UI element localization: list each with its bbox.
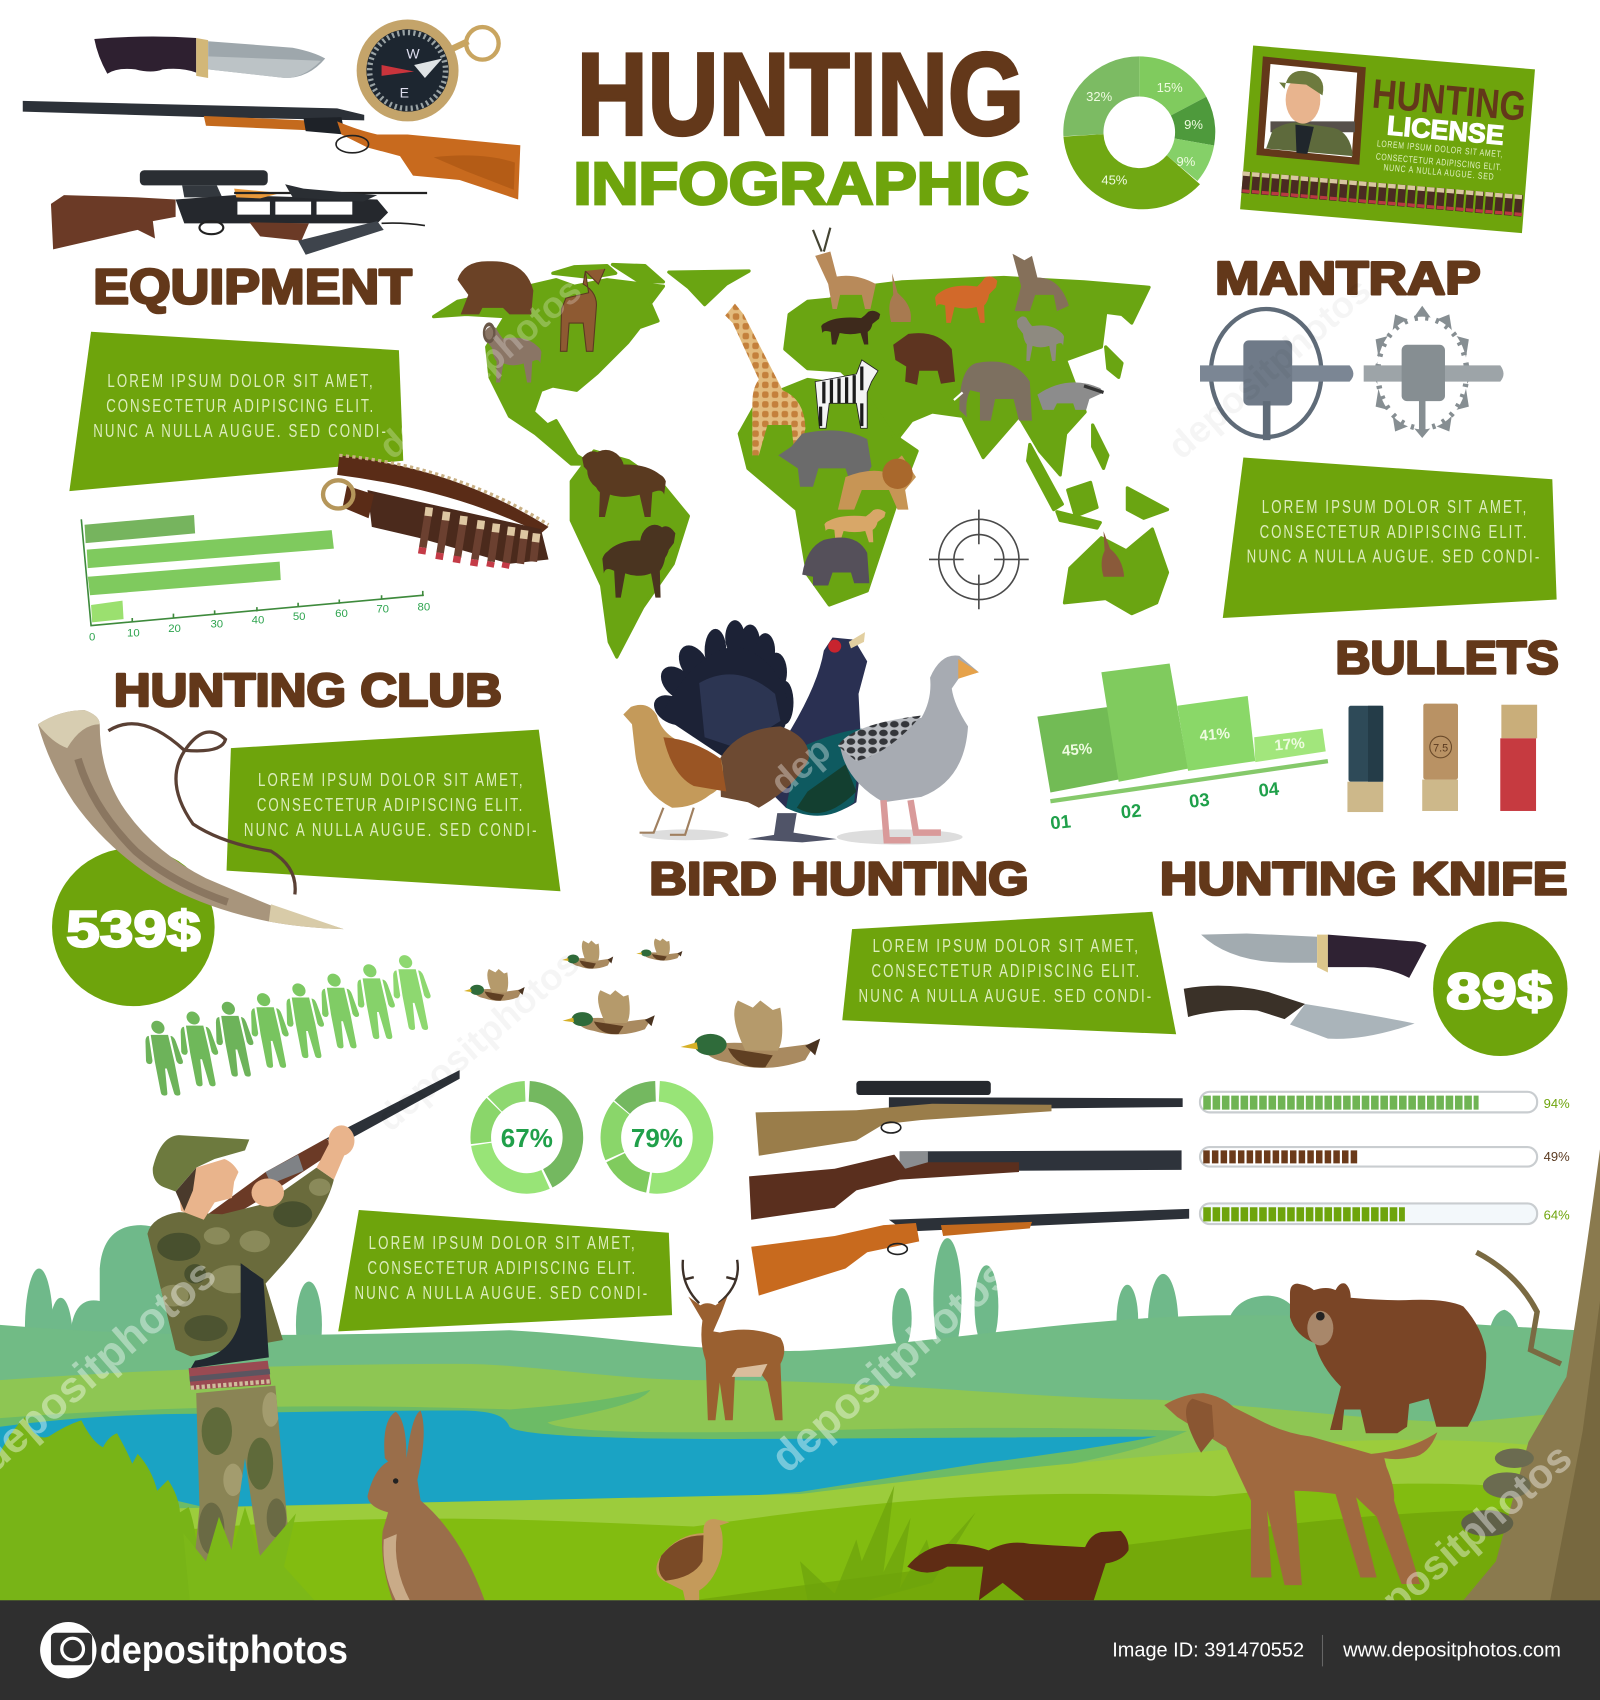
trees right: [892, 1238, 1522, 1388]
icon: mantrap 2: [1364, 306, 1504, 438]
watermarks: dep: [762, 729, 838, 803]
icon: map wolf: [1017, 316, 1064, 361]
heading: hunting knife: HUNTING KNIFE: [1160, 852, 1567, 904]
icon: map hare australia: [1102, 531, 1124, 577]
bar chart: equipment: 10: [127, 627, 140, 639]
watermarks: depositphotos: [369, 942, 587, 1139]
panel: mantrap text: NUNC A NULLA AUGUE. SED CONDI-: [1247, 547, 1539, 567]
icon: knife 2: [1201, 933, 1427, 978]
step bar chart: [1037, 664, 1328, 833]
footer image id: Image ID: 391470552: [1112, 1639, 1304, 1662]
donut chart: top: 45%: [1101, 172, 1128, 187]
icon: map mouflon: [484, 324, 541, 382]
capercaillie body: [720, 632, 867, 842]
icon: map cheetah: [824, 509, 886, 542]
icon: knife 3: [1184, 986, 1415, 1039]
step bar chart: 41%: [1199, 725, 1231, 745]
donut: 79 percent: 79%: [631, 1123, 683, 1153]
panel: knife text: CONSECTETUR ADIPISCING ELIT.: [872, 961, 1139, 981]
step bar chart: 01: [1049, 810, 1072, 833]
bar chart: equipment: 30: [210, 619, 223, 631]
panel: equipment text: CONSECTETUR ADIPISCING ELIT.: [106, 396, 373, 417]
shell brown: 7.5: [1433, 742, 1448, 754]
icon: compass: E: [400, 85, 409, 101]
capercaillie tail: [649, 620, 793, 759]
icon: map deer: [560, 269, 605, 351]
donut chart: top: 32%: [1086, 89, 1113, 104]
hunting license card: NUNC A NULLA AUGUE. SED: [1383, 162, 1494, 182]
bush: [0, 1417, 199, 1600]
donut chart: top: 15%: [1157, 80, 1183, 95]
icon: hare: [367, 1411, 485, 1600]
icon: map giraffe: [725, 304, 805, 455]
shirt: [191, 1263, 269, 1368]
icon: shells: [1347, 704, 1537, 812]
icon: crossbow: [51, 170, 427, 255]
bar chart: equipment: 60: [335, 608, 348, 620]
bar chart: equipment: 0: [89, 632, 95, 644]
bar chart: equipment: 50: [293, 611, 306, 623]
panel: mantrap text: [1223, 458, 1557, 618]
panel: club text: CONSECTETUR ADIPISCING ELIT.: [257, 795, 522, 816]
watermarks: depositphotos: [371, 269, 589, 467]
price: 539: [52, 848, 215, 1006]
panel: mantrap text: CONSECTETUR ADIPISCING ELIT.: [1260, 522, 1527, 542]
hunting license card: LOREM IPSUM DOLOR SIT AMET,: [1376, 138, 1503, 160]
icon: map lion: [838, 455, 916, 510]
icon: horn cord: [108, 724, 295, 894]
step bar chart: 17%: [1274, 735, 1306, 754]
icon: map antelope: [813, 228, 876, 309]
price: 89: [1433, 922, 1567, 1056]
cap: [153, 1135, 249, 1192]
bar chart: equipment: 20: [168, 623, 181, 635]
portrait: [1256, 56, 1366, 165]
icon: bear: [1290, 1283, 1486, 1433]
panel: knife text: LOREM IPSUM DOLOR SIT AMET,: [873, 936, 1138, 957]
bar chart: equipment: 70: [376, 604, 389, 616]
footer bar: [0, 1600, 1600, 1700]
panel: mantrap text: LOREM IPSUM DOLOR SIT AMET,: [1262, 497, 1526, 517]
hunter: [146, 1070, 460, 1605]
donut chart: top: [1063, 56, 1215, 209]
heading: hunting club: HUNTING CLUB: [114, 664, 502, 716]
footer logo: depositphotos: [100, 1629, 348, 1672]
jacket: [148, 1168, 334, 1356]
panel: hunter text: [338, 1210, 672, 1331]
far hills: [0, 1315, 1600, 1600]
goose: [837, 656, 979, 845]
heading: bird hunting: BIRD HUNTING: [649, 852, 1029, 904]
icon: map rhino: [778, 430, 872, 487]
shell band: [1242, 182, 1524, 206]
continents: [434, 265, 1167, 657]
icon: mantrap 1: [1200, 309, 1353, 440]
panel: club text: [227, 730, 560, 891]
tree trunk: [1461, 1149, 1600, 1600]
footer url: www.depositphotos.com: [1342, 1639, 1561, 1662]
title: infographic: INFOGRAPHIC: [573, 150, 1029, 217]
icon: map lynx: [1012, 254, 1069, 311]
panel: hunter text: NUNC A NULLA AUGUE. SED CONDI-: [354, 1283, 647, 1303]
world map: [434, 228, 1167, 657]
footer logo: [40, 1622, 348, 1678]
icon: map hare: [889, 273, 911, 322]
shell brown: [1422, 704, 1458, 811]
panel: club text: LOREM IPSUM DOLOR SIT AMET,: [258, 770, 523, 791]
progress bars: 49%: [1544, 1149, 1570, 1164]
icon: compass: W: [406, 46, 420, 62]
forearm: [317, 1141, 347, 1180]
lake: [0, 1411, 1157, 1507]
gun barrel: [326, 1070, 460, 1146]
donut chart: top: 9%: [1177, 154, 1196, 169]
icon: map boar: [893, 333, 955, 385]
icon: mink: [907, 1531, 1129, 1600]
equipment icons: [23, 20, 520, 255]
hen: [623, 705, 728, 840]
donut: 79 percent: [592, 1072, 722, 1202]
watermarks: depositphotos: [762, 1250, 1019, 1482]
pants: [196, 1386, 288, 1562]
grass tuft: [183, 1507, 314, 1600]
donut chart: top: 9%: [1184, 117, 1203, 132]
step bar chart: 03: [1188, 789, 1211, 812]
icon: dog: [1164, 1393, 1437, 1585]
rifle 1: [756, 1081, 1183, 1156]
rifle 2: [749, 1150, 1182, 1220]
icon: map bison 2: [602, 525, 675, 598]
bar chart: equipment: 40: [252, 614, 264, 626]
panel: knife text: [842, 912, 1176, 1034]
hands: [251, 1125, 354, 1207]
hunting license card: LICENSE: [1386, 110, 1505, 151]
license title: HUNTING: [1370, 70, 1528, 130]
step bar chart: 02: [1120, 799, 1142, 823]
icon: map hippo: [802, 537, 869, 585]
rifles: [749, 1081, 1189, 1296]
icon: map bear: [457, 261, 533, 314]
heading: bullets: BULLETS: [1336, 631, 1559, 683]
step bar chart: 45%: [1061, 740, 1093, 760]
panel: equipment text: LOREM IPSUM DOLOR SIT AMET,: [107, 371, 373, 392]
rifle 3: [751, 1209, 1189, 1296]
icon: ammo belt: [323, 455, 549, 568]
icon: birds: [623, 620, 979, 845]
icon: map marten: [821, 311, 880, 345]
step bar chart: 04: [1257, 778, 1281, 801]
gun stock: [193, 1138, 337, 1236]
icon: double-barrel shotgun: [23, 101, 520, 199]
icon: ducks: [464, 939, 820, 1068]
face: [179, 1159, 238, 1220]
donut: 67 percent: [462, 1072, 592, 1202]
icon: compass: [357, 20, 499, 121]
hunting license card: CONSECTETUR ADIPISCING ELIT.: [1375, 151, 1502, 173]
front meadow: [0, 1440, 1600, 1600]
panel: club text: NUNC A NULLA AUGUE. SED CONDI-: [244, 820, 537, 840]
panel: knife text: NUNC A NULLA AUGUE. SED CONDI-: [859, 986, 1151, 1006]
heading: mantrap: MANTRAP: [1215, 252, 1481, 304]
icon: map bison: [582, 450, 666, 517]
icon: hunting horn: [38, 710, 344, 929]
watermarks: depositphotos: [1160, 269, 1378, 467]
shore: [0, 1390, 1187, 1518]
icon: map zebra: [815, 360, 878, 428]
panel: equipment text: NUNC A NULLA AUGUE. SED CONDI-: [93, 421, 386, 442]
grass blades: [800, 1485, 976, 1600]
panel: equipment text: [69, 332, 403, 491]
panel: hunter text: LOREM IPSUM DOLOR SIT AMET,: [369, 1233, 635, 1254]
ammo belt: [189, 1361, 271, 1390]
progress bars: 94%: [1544, 1096, 1570, 1111]
watermarks: depositphotos: [1336, 1434, 1580, 1655]
panel: hunter text: CONSECTETUR ADIPISCING ELIT.: [367, 1258, 635, 1279]
title: [573, 28, 1029, 217]
heading: equipment: EQUIPMENT: [93, 261, 412, 315]
people row: [138, 955, 437, 1096]
icon: map fox: [935, 276, 997, 323]
progress bars: [1200, 1092, 1570, 1224]
hair: [176, 1168, 196, 1211]
icon: knife: [94, 37, 325, 78]
hunting license card: [1240, 46, 1535, 233]
shell blue: [1347, 706, 1383, 812]
icon: deer: [683, 1260, 784, 1420]
bar chart: equipment: [81, 515, 430, 644]
trees left: [25, 1225, 322, 1388]
shell red: [1500, 705, 1537, 811]
bar chart: equipment: 80: [418, 601, 430, 613]
price: 89: 89$: [1446, 962, 1552, 1019]
icon: quail: [656, 1519, 730, 1600]
icon: map badger: [1037, 382, 1104, 410]
title: hunting: HUNTING: [577, 28, 1024, 159]
progress bars: 64%: [1544, 1208, 1570, 1223]
price: 539: 539$: [66, 900, 201, 957]
donut: 67 percent: 67%: [501, 1123, 553, 1153]
icon: map elephant: [954, 361, 1032, 421]
landscape: [0, 1225, 1600, 1600]
mid meadow: [0, 1364, 1600, 1600]
icon: crosshair: [929, 510, 1029, 609]
